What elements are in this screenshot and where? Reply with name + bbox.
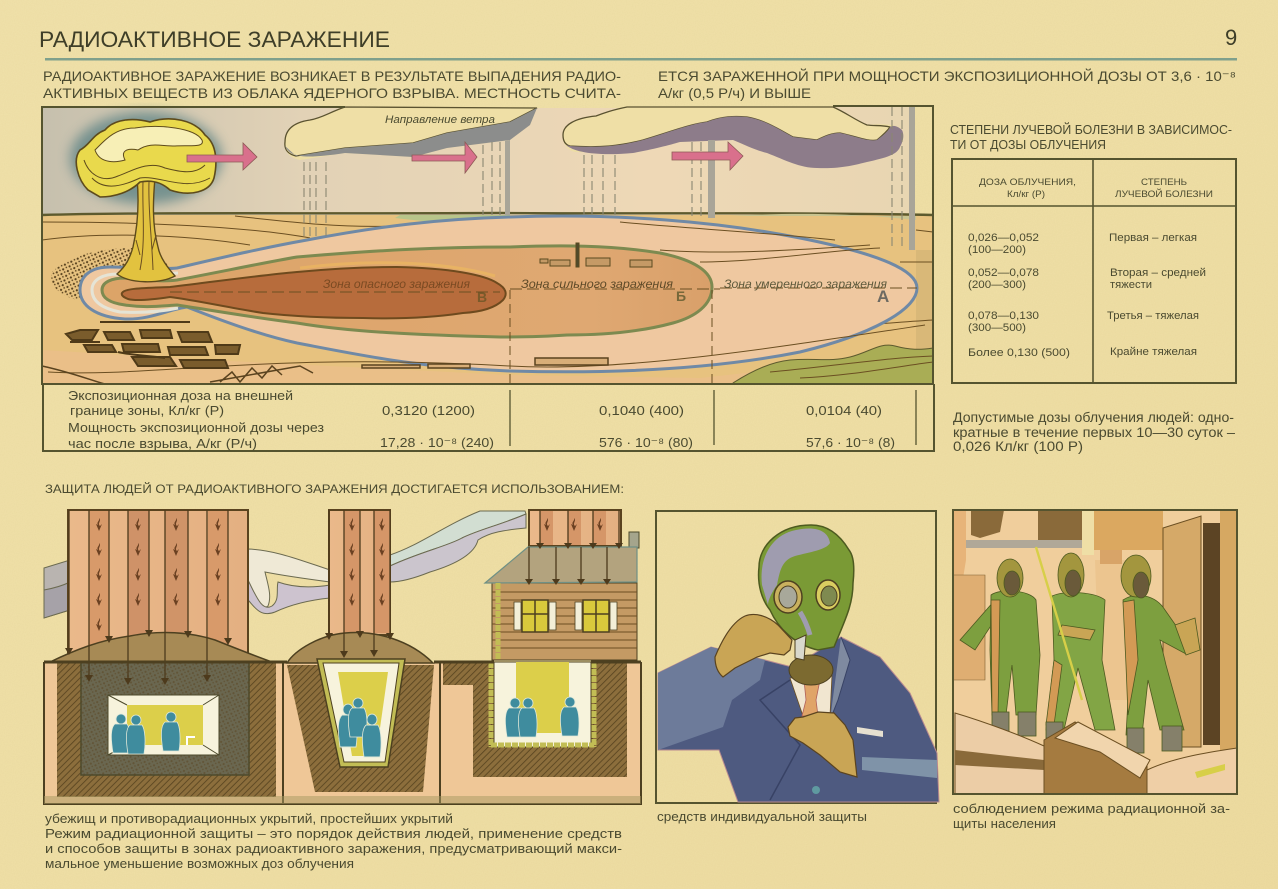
table: zone doses: Мощность экспозиционной дозы через bbox=[68, 420, 324, 435]
jacket bbox=[658, 637, 939, 802]
house bbox=[485, 532, 639, 660]
shelter 3 basement bbox=[443, 662, 627, 777]
shelter 2 underground bbox=[287, 632, 434, 792]
bridge and railway bbox=[42, 358, 608, 384]
radiation sickness heading bbox=[950, 122, 1232, 152]
caption: shelters: убежищ и противорадиационных укрытий, простейших укрытий bbox=[45, 811, 453, 826]
head and mask bbox=[759, 525, 854, 650]
terrain lines bbox=[620, 222, 880, 262]
zone labels: Зона умеренного заражения bbox=[724, 279, 887, 291]
mound 1 bbox=[50, 633, 272, 662]
page number: 9 bbox=[1225, 25, 1237, 50]
zone B middle bbox=[102, 246, 712, 337]
panel: rescue team bbox=[953, 510, 1237, 794]
frame lines bbox=[44, 660, 641, 664]
mushroom glow bbox=[70, 112, 222, 204]
caption: shelters: мальное уменьшение возможных доз облучения bbox=[45, 856, 354, 871]
table: zone doses: 57,6 · 10⁻⁸ (8) bbox=[806, 435, 895, 450]
burnt area around the base bbox=[51, 248, 175, 300]
mushroom cloud bbox=[76, 119, 216, 282]
column: radiation over house bbox=[529, 510, 621, 546]
caption: rescue team: соблюдением режима радиационной за- bbox=[953, 801, 1230, 816]
table: radiation sickness degrees: Крайне тяжелая bbox=[1110, 346, 1197, 358]
table: radiation sickness degrees: ДОЗА ОБЛУЧЕНИЯ, bbox=[979, 177, 1076, 188]
table: radiation sickness degrees: Третья – тяжелая bbox=[1107, 310, 1199, 322]
table: radiation sickness degrees: 0,078—0,130 bbox=[968, 310, 1039, 322]
caption: rescue team bbox=[953, 801, 1230, 831]
figure 1 bbox=[960, 559, 1040, 736]
radiation sickness heading: ТИ ОТ ДОЗЫ ОБЛУЧЕНИЯ bbox=[950, 138, 1106, 152]
permissible doses note bbox=[953, 410, 1236, 454]
caption: shelters: и способов защиты в зонах радиоактивного заражения, предусматривающий макси- bbox=[45, 841, 622, 856]
figure 2 bbox=[1046, 553, 1115, 738]
title: РАДИОАКТИВНОЕ ЗАРАЖЕНИЕ bbox=[39, 27, 390, 52]
wind label: Направление ветра bbox=[385, 114, 495, 126]
arrow: wind direction 1 bbox=[187, 143, 257, 170]
table: radiation sickness degrees: Более 0,130 (500) bbox=[968, 347, 1070, 359]
panel frame bbox=[42, 106, 933, 384]
intro text bbox=[43, 67, 1236, 101]
staff bbox=[1036, 547, 1082, 700]
filter bbox=[789, 655, 833, 685]
stem bbox=[117, 178, 175, 282]
arrow: wind direction 2 bbox=[412, 142, 477, 173]
zone V inner bbox=[122, 267, 506, 318]
table: radiation sickness degrees: СТЕПЕНЬ bbox=[1141, 177, 1187, 188]
radiation sickness heading: СТЕПЕНИ ЛУЧЕВОЙ БОЛЕЗНИ В ЗАВИСИМОС- bbox=[950, 122, 1232, 137]
green patch bbox=[733, 345, 933, 384]
eyepieces bbox=[774, 581, 802, 613]
ground line and cells bbox=[44, 662, 641, 804]
column: radiation over shelter 2 bbox=[329, 510, 390, 635]
clouds bbox=[285, 107, 537, 156]
panel: shelters bbox=[44, 510, 641, 804]
shirt and tie bbox=[790, 675, 832, 716]
table: zone doses: границе зоны, Кл/кг (Р) bbox=[70, 403, 224, 418]
permissible doses note: кратные в течение первых 10—30 суток – bbox=[953, 425, 1236, 440]
table: zone doses: Экспозиционная доза на внешней bbox=[68, 388, 293, 403]
shelter 1 underground bbox=[57, 662, 276, 797]
table: zone doses: 0,0104 (40) bbox=[806, 403, 882, 418]
smoke streaks bbox=[44, 511, 526, 618]
rubble bbox=[955, 713, 1044, 794]
intro text: ЕТСЯ ЗАРАЖЕННОЙ ПРИ МОЩНОСТИ ЭКСПОЗИЦИОННОЙ ДОЗЫ ОТ 3,6 · 10⁻⁸ bbox=[658, 67, 1236, 84]
panel: contamination zones map: А bbox=[877, 287, 889, 306]
zone labels bbox=[323, 279, 887, 291]
intro text: АКТИВНЫХ ВЕЩЕСТВ ИЗ ОБЛАКА ЯДЕРНОГО ВЗРЫВА. МЕСТНОСТЬ СЧИТА- bbox=[43, 85, 621, 101]
sky bbox=[42, 107, 915, 216]
protection heading: ЗАЩИТА ЛЮДЕЙ ОТ РАДИОАКТИВНОГО ЗАРАЖЕНИЯ ДОСТИГАЕТСЯ ИСПОЛЬЗОВАНИЕМ: bbox=[45, 483, 624, 496]
table: radiation sickness degrees: 0,052—0,078 bbox=[968, 267, 1039, 279]
zone A outer bbox=[80, 216, 917, 372]
table: radiation sickness degrees: Первая – легкая bbox=[1109, 232, 1197, 244]
table: zone doses: 576 · 10⁻⁸ (80) bbox=[599, 435, 693, 450]
table: zone doses bbox=[43, 384, 934, 451]
table: radiation sickness degrees bbox=[952, 159, 1236, 383]
column: radiation over shelter 1 bbox=[68, 510, 248, 660]
panel: contamination zones map bbox=[42, 106, 933, 384]
hands bbox=[715, 614, 792, 677]
arrow: wind direction 3 bbox=[672, 142, 743, 170]
panel: contamination zones map: Б bbox=[676, 288, 686, 304]
caption: shelters bbox=[45, 811, 622, 871]
table: radiation sickness degrees: (100—200) bbox=[968, 244, 1026, 256]
table: radiation sickness degrees: (300—500) bbox=[968, 322, 1026, 334]
sleeve bbox=[658, 647, 765, 750]
caption: gas mask: средств индивидуальной защиты bbox=[657, 809, 867, 824]
table: zone doses: час после взрыва, А/кг (Р/ч) bbox=[68, 436, 257, 451]
dashed zone axis bbox=[170, 288, 917, 292]
table: zone doses: 17,28 · 10⁻⁸ (240) bbox=[380, 435, 494, 450]
zone labels: Зона опасного заражения bbox=[323, 279, 470, 291]
zone labels: Зона сильного заражения bbox=[521, 279, 673, 291]
ruined walls bbox=[971, 510, 1004, 538]
door bbox=[1163, 516, 1201, 747]
caption: shelters: Режим радиационной защиты – это порядок действия людей, применение средств bbox=[45, 826, 622, 841]
table: radiation sickness degrees: тяжести bbox=[1110, 279, 1152, 291]
caption: rescue team: щиты населения bbox=[953, 816, 1056, 831]
city bbox=[66, 322, 240, 368]
panel: contamination zones map: В bbox=[477, 289, 487, 305]
table: radiation sickness degrees: ЛУЧЕВОЙ БОЛЕЗНИ bbox=[1115, 188, 1213, 200]
permissible doses note: Допустимые дозы облучения людей: одно- bbox=[953, 410, 1234, 425]
intro text: А/кг (0,5 Р/ч) И ВЫШЕ bbox=[658, 85, 811, 101]
rays and arrows bbox=[69, 510, 619, 680]
permissible doses note: 0,026 Кл/кг (100 Р) bbox=[953, 439, 1083, 454]
table: radiation sickness degrees: (200—300) bbox=[968, 279, 1026, 291]
table: zone doses: 0,3120 (1200) bbox=[382, 403, 475, 418]
table: radiation sickness degrees: 0,026—0,052 bbox=[968, 232, 1039, 244]
factory bbox=[540, 243, 652, 267]
table: radiation sickness degrees: Кл/кг (Р) bbox=[1007, 189, 1045, 200]
fallout rain bbox=[304, 107, 902, 250]
table: zone doses: 0,1040 (400) bbox=[599, 403, 684, 418]
ground bbox=[42, 215, 933, 384]
figure 3 bbox=[1121, 555, 1200, 753]
panel: gas mask man bbox=[656, 511, 939, 803]
cap bbox=[76, 119, 216, 197]
table: radiation sickness degrees: Вторая – средней bbox=[1110, 267, 1206, 279]
intro text: РАДИОАКТИВНОЕ ЗАРАЖЕНИЕ ВОЗНИКАЕТ В РЕЗУЛЬТАТЕ ВЫПАДЕНИЯ РАДИО- bbox=[43, 68, 621, 84]
